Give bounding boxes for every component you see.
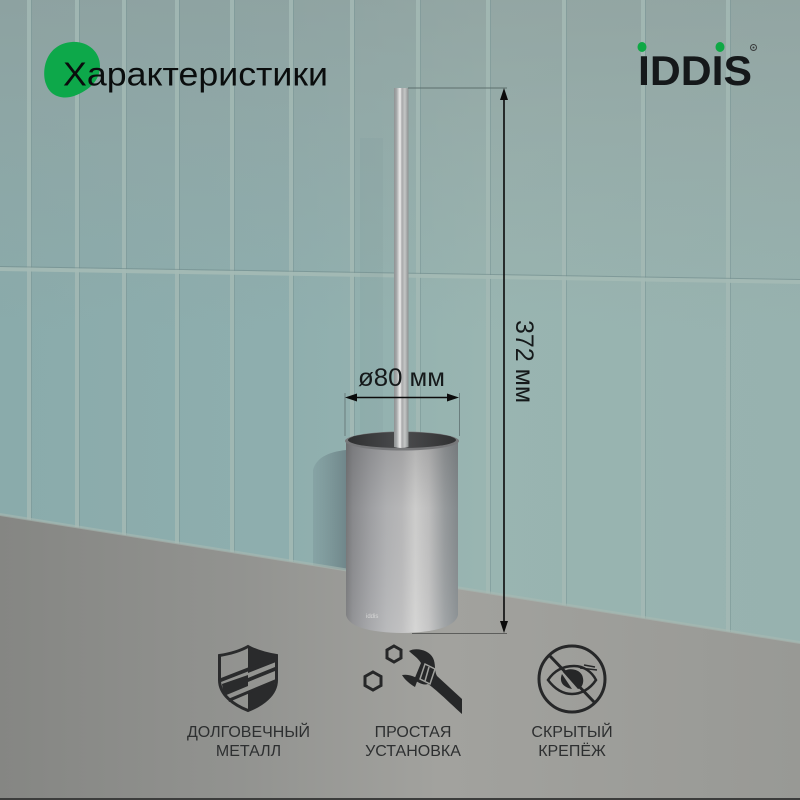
registered mark bbox=[750, 44, 756, 50]
engraved brand mark on holder: iddis bbox=[366, 614, 378, 620]
icon: shield bbox=[220, 646, 276, 710]
holder rim and dark interior bbox=[345, 432, 459, 450]
feature: durable metal: МЕТАЛЛ bbox=[216, 743, 281, 760]
shadow of the holder and rod on the wall bbox=[313, 138, 383, 571]
icon: wrench and nuts bbox=[365, 646, 462, 714]
label: ПРОСТАЯ bbox=[375, 724, 451, 741]
icon: crossed-out eye bbox=[539, 646, 605, 712]
title with green blob bbox=[44, 42, 328, 98]
product: toilet brush holder bbox=[345, 88, 459, 633]
label: ДОЛГОВЕЧНЫЙ bbox=[187, 722, 310, 741]
feature: hidden fastening bbox=[531, 646, 613, 760]
height label: 372 мм bbox=[510, 320, 538, 403]
dimension: height 372 mm bbox=[408, 88, 538, 634]
dimension: diameter 80 mm bbox=[345, 364, 460, 436]
feature: hidden fastening: КРЕПЁЖ bbox=[538, 742, 606, 760]
feature: durable metal bbox=[187, 646, 310, 760]
title text: Характеристики bbox=[63, 56, 328, 92]
green blob bbox=[44, 42, 100, 98]
brush rod bbox=[394, 88, 408, 448]
background: concrete floor bbox=[0, 513, 800, 800]
feature: easy installation: УСТАНОВКА bbox=[365, 743, 461, 760]
logo: IDDIS: IDDIS bbox=[638, 47, 752, 94]
label: СКРЫТЫЙ bbox=[531, 722, 613, 741]
diameter label: ø80 мм bbox=[358, 364, 445, 392]
logo green dots bbox=[638, 42, 724, 52]
holder cylinder body bbox=[346, 441, 458, 633]
feature: easy installation bbox=[365, 646, 462, 760]
